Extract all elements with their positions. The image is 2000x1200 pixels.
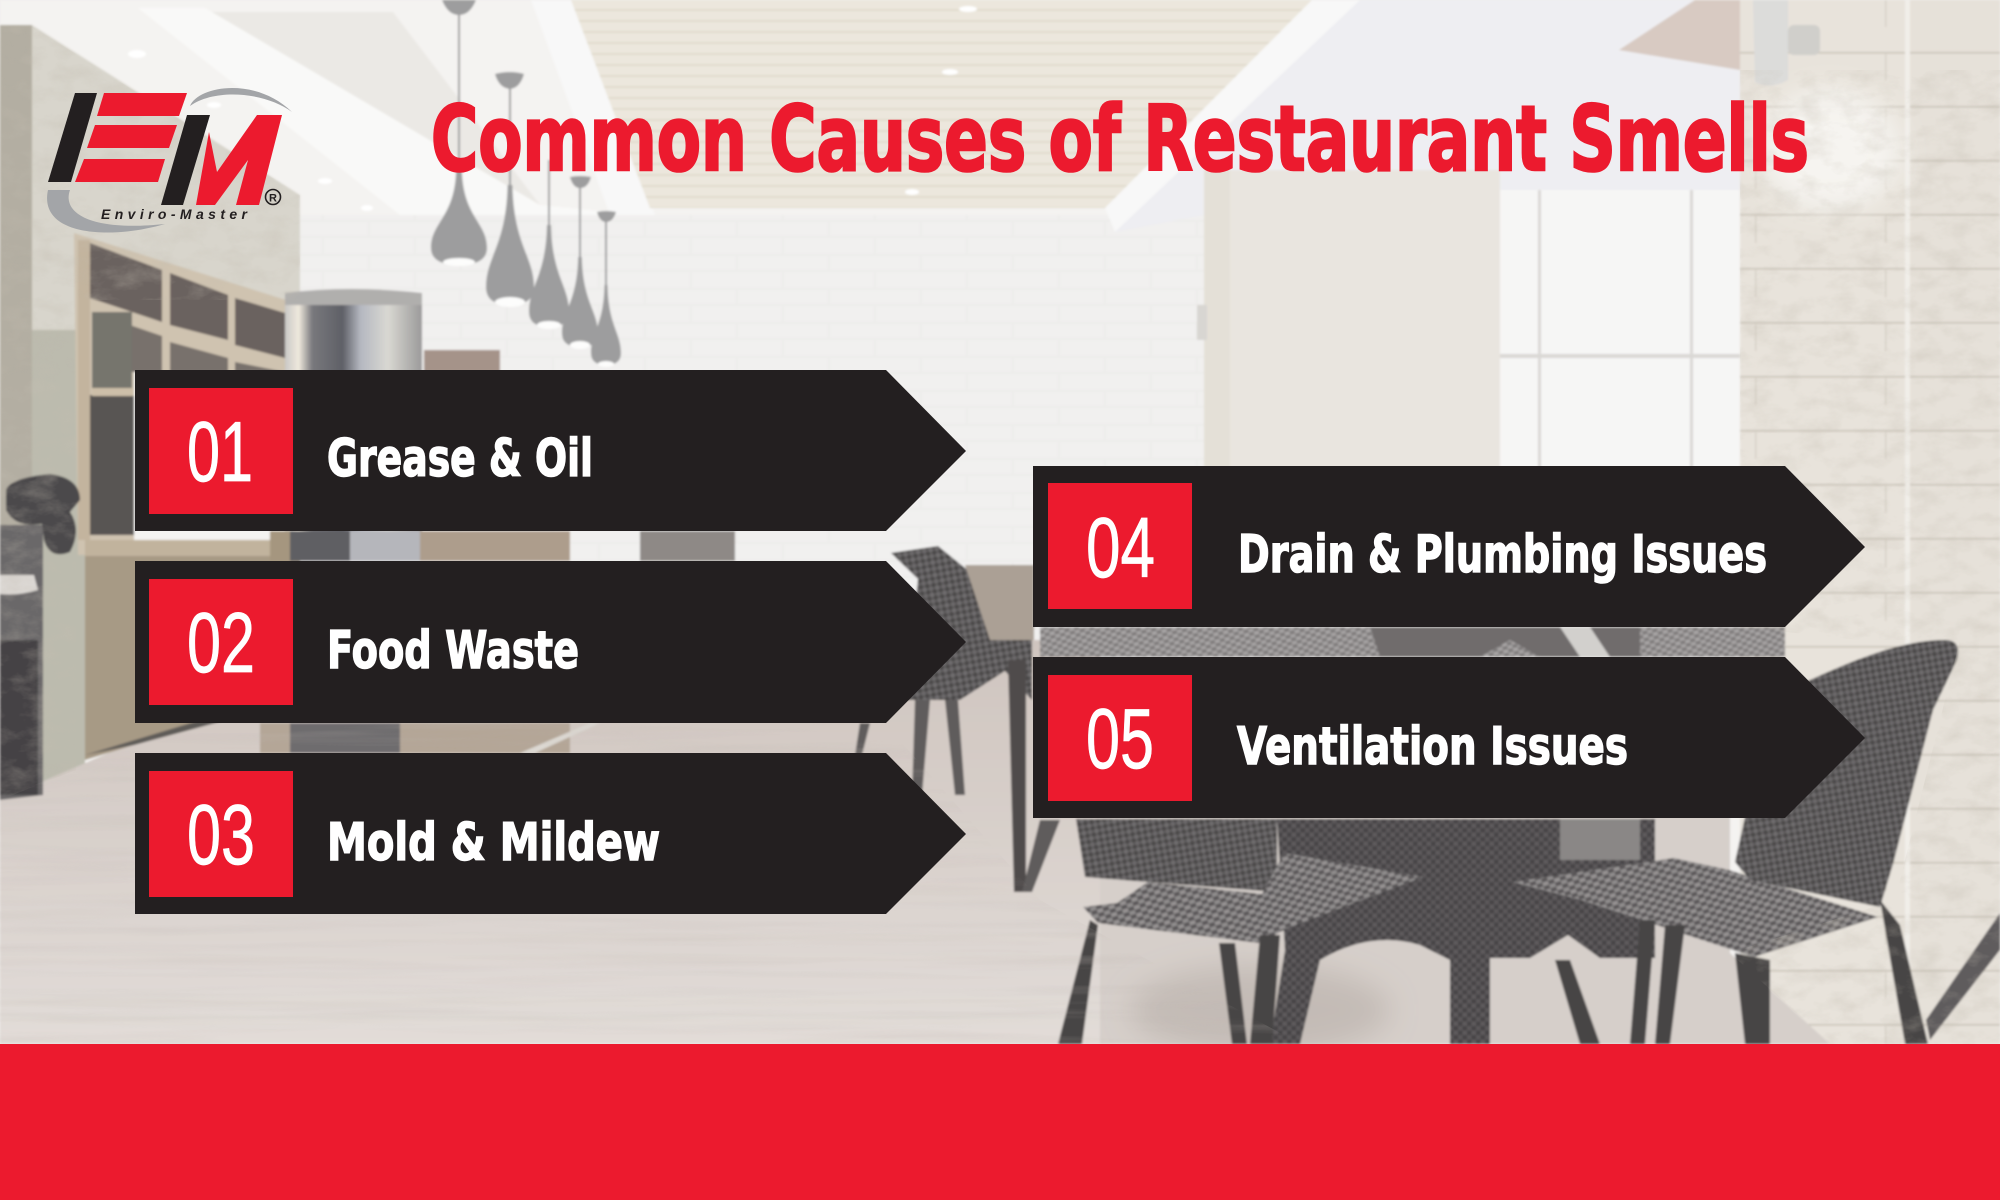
number badge 02 (149, 579, 293, 705)
label: Food Waste (327, 621, 579, 681)
registered mark: R (269, 192, 277, 204)
pendant lamps (431, 0, 621, 365)
table and chairs, middle (891, 546, 1032, 700)
number badge 02: 02 (187, 596, 255, 691)
label: Drain & Plumbing Issues (1238, 525, 1767, 585)
fan and rattan unit (0, 525, 43, 800)
table and chairs, right (1040, 627, 1785, 657)
number badge 05 (1048, 675, 1192, 801)
ceiling spots (128, 6, 977, 211)
number badge 01 (149, 388, 293, 514)
floor (0, 640, 1100, 1044)
number badge 03 (149, 771, 293, 897)
bottom red band (0, 1044, 2000, 1200)
label: Ventilation Issues (1237, 717, 1628, 777)
arrow item 05 (1033, 657, 1865, 818)
number badge 04: 04 (1086, 501, 1155, 596)
arrow shape (135, 753, 966, 914)
logo: Enviro-Master (47, 88, 292, 233)
logo wordmark: Enviro-Master (101, 206, 249, 222)
number badge 01: 01 (187, 405, 253, 500)
label: Grease & Oil (327, 429, 593, 489)
arrow shape (1033, 657, 1865, 818)
logo letter E and M (75, 93, 282, 205)
arrow item 01 (135, 370, 966, 531)
number badge 05: 05 (1086, 692, 1154, 787)
arrow shape (135, 370, 966, 531)
number badge 04 (1048, 483, 1192, 609)
label: Mold & Mildew (327, 813, 660, 873)
arrow item 03 (135, 753, 966, 914)
shelves and cabinet (74, 233, 286, 555)
number badge 03: 03 (187, 788, 255, 883)
arrow shape (1033, 466, 1865, 627)
arrow shape (135, 561, 966, 723)
registered mark (266, 190, 280, 204)
wall sconces (1197, 0, 1820, 340)
logo letter I bars (48, 93, 210, 205)
logo swooshes (47, 88, 292, 233)
arrow item 02 (135, 561, 966, 723)
arrow item 04 (1033, 466, 1865, 627)
